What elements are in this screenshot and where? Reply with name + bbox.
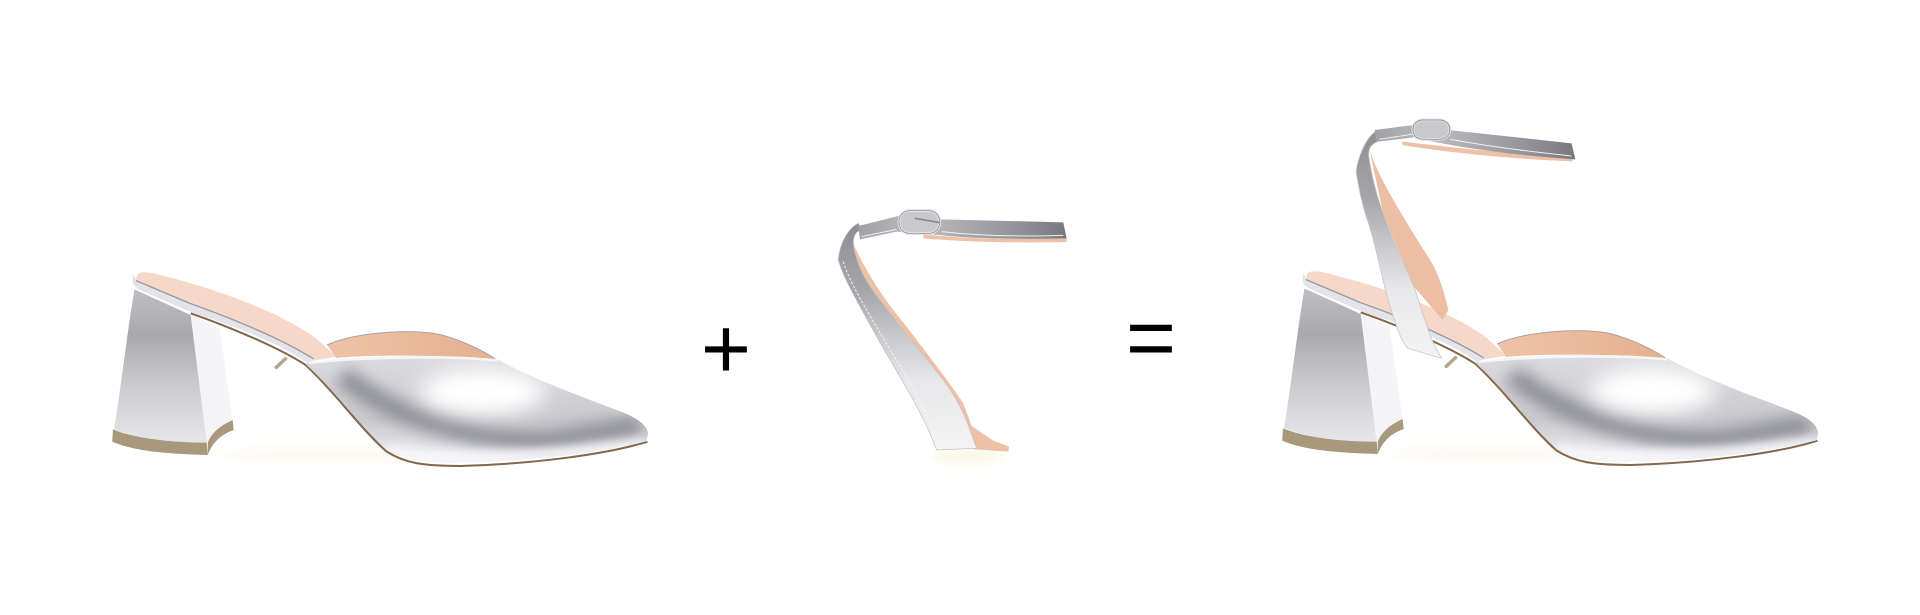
stitching: [843, 262, 935, 435]
plus sign: +: [701, 301, 751, 397]
illustration: detachable ankle strap: [838, 211, 1067, 461]
strap horizontal band: [858, 216, 1067, 239]
illustration: mule with strap attached: [1282, 120, 1818, 465]
illustration: silver mule shoe: [112, 272, 648, 466]
combined shoe: [1282, 271, 1818, 465]
attached strap: [1356, 120, 1575, 358]
strap peach lining: [854, 245, 1009, 452]
equals sign: =: [1126, 290, 1176, 386]
strap vertical band: [838, 223, 977, 450]
strap lower stitch: [862, 229, 1063, 237]
buckle: [899, 211, 940, 233]
shadow under strap: [930, 453, 1003, 461]
